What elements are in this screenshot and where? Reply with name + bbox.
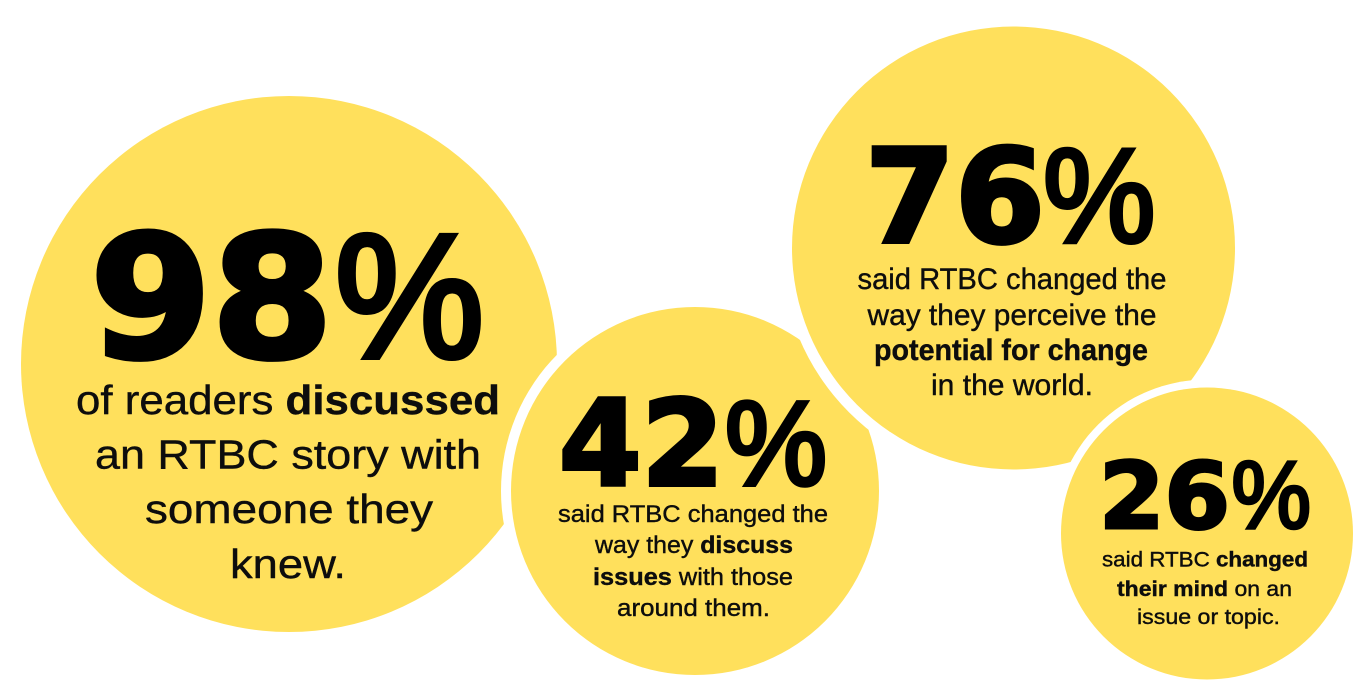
stat: 76%: %	[1043, 122, 1156, 271]
text: 98% description: knew.	[230, 541, 346, 587]
stat: 98%: %	[335, 199, 484, 395]
text: 76% description: way they perceive the	[866, 299, 1156, 332]
stat: 26%: 26	[1099, 443, 1230, 550]
text: 76% description: potential for change	[874, 334, 1148, 367]
text: 76% description: in the world.	[931, 369, 1093, 402]
text: 26% description: said RTBC changed	[1102, 548, 1308, 572]
panel: 42% circle	[511, 307, 879, 675]
text: 76% description: said RTBC changed the	[858, 263, 1166, 296]
text: 42% description: issues with those	[593, 564, 793, 591]
text: 42% description: around them.	[617, 595, 770, 622]
text: 42% description: way they discuss	[594, 532, 793, 559]
stat: 26%: %	[1232, 442, 1311, 549]
text: 98% description	[76, 377, 500, 587]
text: 26% description	[1102, 548, 1308, 629]
text: 26% description: their mind on an	[1117, 578, 1292, 601]
text: 98% description: an RTBC story with	[95, 432, 481, 478]
panel: 76% circle	[792, 26, 1235, 470]
panel: 98% circle	[21, 96, 557, 632]
text: 42% description	[558, 501, 828, 622]
text: 76% description	[858, 263, 1166, 402]
stat: 76%: 76	[865, 121, 1045, 273]
panel: 26% circle	[1061, 388, 1353, 680]
text: 42% description: said RTBC changed the	[558, 501, 828, 528]
text: 98% description: of readers discussed	[76, 377, 500, 423]
stat: 42%: %	[725, 377, 827, 511]
text: 26% description: issue or topic.	[1137, 606, 1280, 629]
stat: 98%: 98	[90, 200, 333, 398]
stat: 42%: 42	[559, 376, 724, 514]
text: 98% description: someone they	[145, 486, 434, 532]
